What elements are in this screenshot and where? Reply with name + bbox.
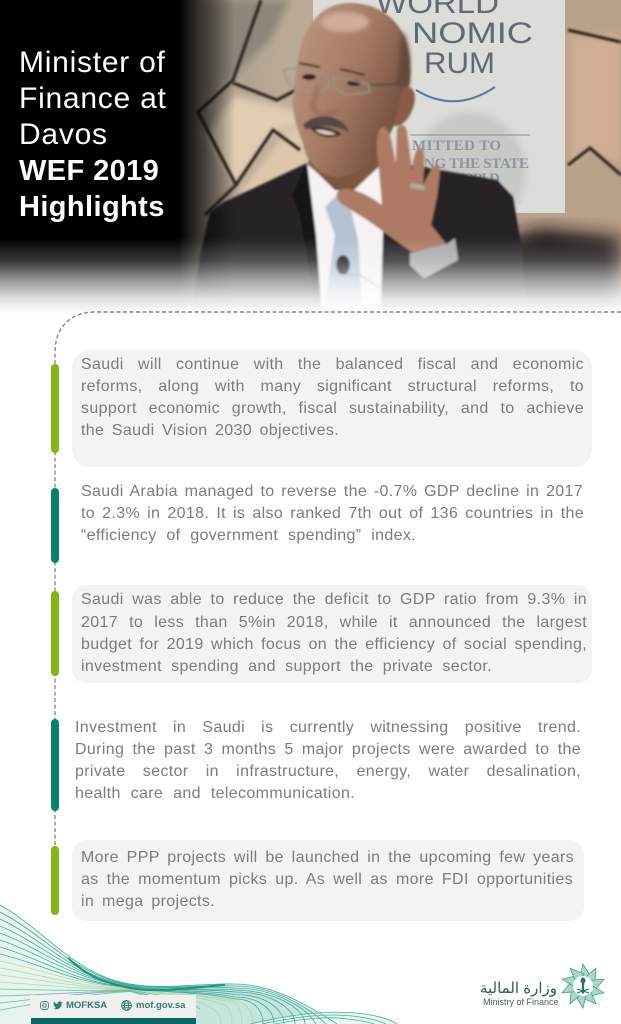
fade to white [0, 238, 621, 345]
text: During the past 3 months 5 major projects were awarded to the [75, 741, 581, 758]
text: as the momentum picks up. As well as more FDI opportunities [81, 871, 573, 888]
header photo: minister speaking at the World Economic Forum: RUM [424, 47, 495, 80]
hand [336, 125, 447, 252]
text: Saudi was able to reduce the deficit to GDP ratio from 9.3% in [81, 591, 587, 608]
marker 1 [51, 364, 59, 453]
title: Finance at [19, 82, 167, 115]
text block 1 [81, 356, 584, 439]
text: Saudi will continue with the balanced fiscal and economic [81, 356, 584, 373]
panel: card backgrounds [72, 350, 592, 921]
text: reforms, along with many significant structural reforms, to [81, 378, 584, 395]
card 3 background [72, 585, 592, 683]
title: Minister of [19, 46, 166, 79]
card 1 background [72, 350, 592, 467]
text: investment spending and support the private sector. [81, 658, 492, 675]
text: support economic growth, fiscal sustainability, and to achieve [81, 400, 584, 417]
brows and eyes [299, 63, 365, 75]
header photo: minister speaking at the World Economic Forum [0, 0, 621, 310]
lapel microphone [336, 255, 350, 275]
text: private sector in infrastructure, energy, water desalination, [75, 763, 581, 780]
marker 5 [51, 846, 59, 915]
english name: Ministry of Finance [483, 997, 559, 1007]
poster [313, 0, 565, 213]
handle: MOFKSA [66, 1000, 107, 1011]
header photo: minister speaking at the World Economic Forum: NG THE STATE [424, 156, 529, 172]
title: WEF 2019 [19, 155, 159, 187]
icon: instagram [40, 1001, 49, 1010]
title: Highlights [19, 191, 165, 223]
ministry of finance logo [480, 963, 605, 1009]
text: in mega projects. [81, 893, 215, 910]
title [19, 46, 167, 223]
header photo: minister speaking at the World Economic Forum: MITTED TO [412, 138, 501, 154]
text: 2017 to less than 5%in 2018, while it announced the largest [81, 614, 587, 631]
head [293, 3, 410, 177]
title: Davos [19, 118, 108, 151]
person [190, 3, 621, 330]
text: the Saudi Vision 2030 objectives. [81, 422, 339, 439]
nose [312, 85, 340, 116]
card 5 background [72, 840, 584, 921]
icon: twitter [53, 1002, 63, 1010]
dashed timeline [54, 311, 621, 846]
ear [393, 87, 415, 126]
text block 5 [81, 849, 574, 910]
icon: globe [121, 1000, 132, 1011]
watch [410, 238, 458, 278]
marker 4 [51, 719, 59, 811]
marker 3 [51, 591, 59, 676]
glasses [283, 68, 400, 95]
header photo: minister speaking at the World Economic Forum: NOMIC [412, 17, 533, 50]
text block 2 [81, 483, 584, 544]
black side shading [0, 0, 235, 345]
text: to 2.3% in 2018. It is also ranked 7th out of 136 countries in the [81, 505, 584, 522]
text block 3 [81, 591, 587, 675]
moustache [303, 116, 349, 132]
text: Investment in Saudi is currently witnessing positive trend. [75, 719, 581, 736]
marker 2 [51, 488, 59, 563]
text: budget for 2019 which focus on the efficiency of social spending, [81, 636, 587, 653]
arabic name: وزارة المالية [480, 980, 557, 997]
footer social bar [30, 995, 196, 1024]
text: Saudi Arabia managed to reverse the -0.7% GDP decline in 2017 [81, 483, 583, 500]
website: mof.gov.sa [136, 1000, 185, 1011]
wall panels [205, 95, 300, 185]
text: More PPP projects will be launched in the upcoming few years [81, 849, 574, 866]
header photo: minister speaking at the World Economic Forum: WORLD [450, 171, 500, 187]
text: “efficiency of government spending” index. [81, 527, 416, 544]
audience head silhouette behind [470, 228, 621, 330]
decorative wave graphic [0, 904, 398, 1024]
icon: emblem [561, 963, 605, 1009]
text block 4 [75, 719, 581, 802]
social teal strip [31, 1018, 196, 1024]
text: health care and telecommunication. [75, 785, 355, 802]
mouth [310, 126, 342, 137]
